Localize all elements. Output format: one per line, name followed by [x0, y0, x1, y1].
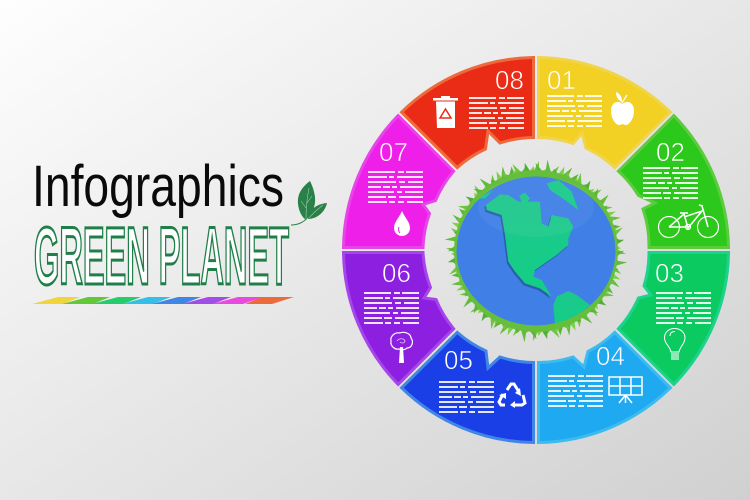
- icon: apple: [611, 92, 634, 125]
- continents: [478, 180, 590, 325]
- globe highlight: [478, 177, 594, 237]
- icon: water drop: [394, 211, 410, 236]
- infographic canvas: GREEN PLANET: [34, 211, 289, 302]
- panel: 07: 07: [379, 137, 408, 167]
- panel: 02: 02: [656, 137, 685, 167]
- icon: light bulb: [664, 328, 685, 360]
- panel: 06: 06: [382, 258, 411, 288]
- globe: [430, 145, 642, 357]
- icon: leaves: [291, 181, 327, 225]
- panel: 01: [538, 58, 670, 168]
- panel: 04: 04: [596, 341, 625, 371]
- icon: recycle arrows: [499, 384, 525, 408]
- rainbow strip: [32, 297, 294, 304]
- icon: recycling bin: [433, 96, 458, 128]
- icon: tree: [391, 332, 412, 363]
- panel: 04: [538, 332, 670, 442]
- icon: solar panel: [609, 377, 642, 403]
- panel: 08: [402, 58, 534, 168]
- planet disc: [456, 172, 616, 330]
- panel: 03: [618, 252, 728, 384]
- panel: 05: 05: [444, 345, 473, 375]
- icon: bicycle: [658, 205, 718, 238]
- title: Infographics: Infographics: [32, 154, 284, 219]
- panel: 01: 01: [547, 65, 576, 95]
- grass blades: [430, 145, 642, 357]
- panel: 03: 03: [655, 258, 684, 288]
- panel: 06: [344, 252, 454, 384]
- panel: 07: [344, 116, 454, 247]
- panel: 02: [618, 116, 728, 247]
- grass base over planet edge: [454, 170, 618, 332]
- panel: 08: 08: [495, 65, 524, 95]
- panel: 05: [402, 332, 534, 442]
